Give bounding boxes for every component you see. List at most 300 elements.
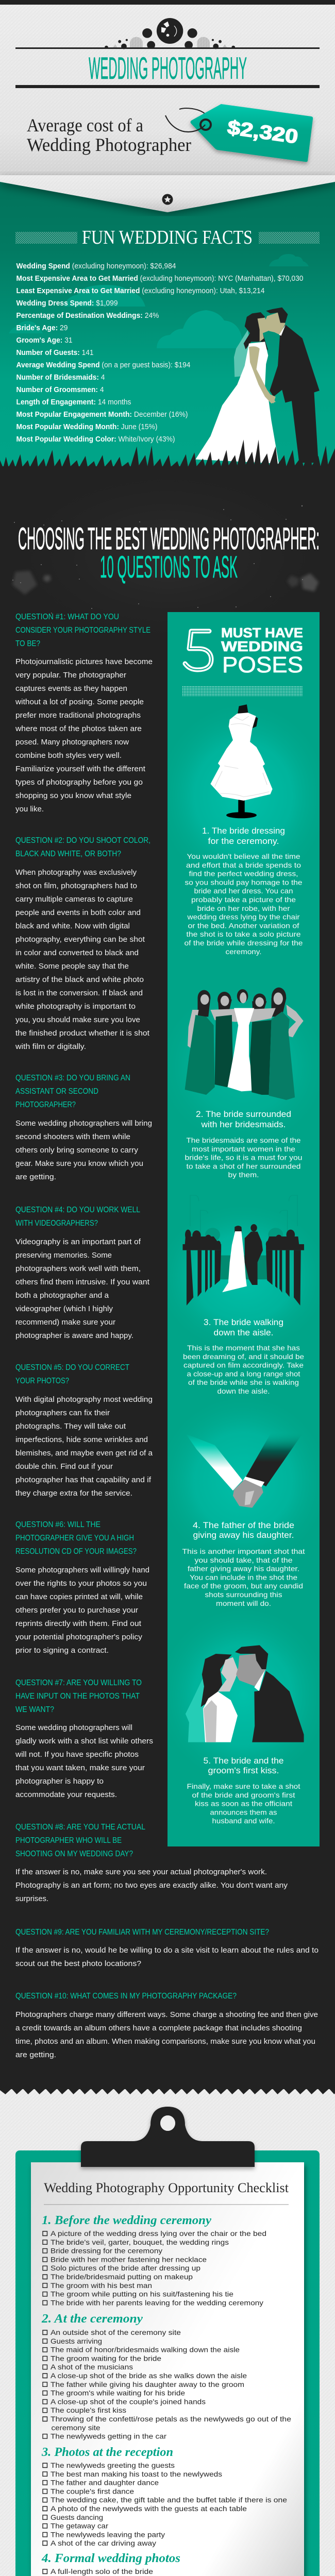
text: pose 5: Finally, make sure to take a shot xyxy=(187,1782,300,1790)
checklist section 4 xyxy=(41,2552,210,2576)
question 5: photographers can fix their xyxy=(15,1409,110,1417)
panel background xyxy=(167,612,320,1846)
text: pose 2 xyxy=(185,1136,302,1179)
caption 5: groom's first kiss. xyxy=(208,1766,279,1775)
question 5 xyxy=(15,1363,153,1498)
bride arm xyxy=(204,1700,217,1742)
question 4: others find them intrusive. If you want xyxy=(15,1278,150,1286)
checklist section 3 xyxy=(41,2446,287,2547)
question 8: If the answer is no, make sure you see your actual photographer's work. xyxy=(15,1868,267,1876)
poses heading xyxy=(221,625,303,677)
groom collar xyxy=(279,325,286,336)
question 5: photographs. They will take out xyxy=(15,1422,126,1431)
clouds xyxy=(9,254,309,348)
zigzag edge xyxy=(0,2087,335,2094)
question 7: accommodate your requests. xyxy=(15,1790,117,1799)
question 10: Photographers charge many different ways. Some charge a shooting fee and then give xyxy=(15,2010,318,2019)
question 1: TO BE? xyxy=(15,639,40,648)
top black bar xyxy=(0,0,335,5)
checklist section 2: A close-up shot of the bride as she walks down the aisle xyxy=(51,2371,247,2380)
illustration: holding hands xyxy=(186,1432,304,1508)
caption 1 xyxy=(202,826,285,846)
bride face and neck xyxy=(218,1657,238,1691)
hatched semicircles xyxy=(113,37,227,47)
text: pose 1: of the bride while dressing for the xyxy=(185,939,303,947)
text: pose 5: announces them as xyxy=(210,1808,277,1816)
caption 2 xyxy=(196,1109,291,1129)
text: pose 3: This is the moment that she has xyxy=(187,1344,300,1352)
gown 1 xyxy=(185,1015,215,1095)
gown 4 xyxy=(250,1020,272,1095)
hands xyxy=(233,1480,263,1508)
text: pose 1: the shot is to take a solo picture xyxy=(187,930,301,938)
illustration: bride walking down the aisle xyxy=(182,1195,304,1306)
tag hole xyxy=(200,120,211,130)
gown 5 xyxy=(269,1011,295,1100)
text: pose 1: You wouldn't believe all the time xyxy=(187,852,300,860)
question 6: prior to signing a contract. xyxy=(15,1646,109,1655)
caption 1: for the ceremony. xyxy=(208,836,279,846)
illustration: dress on stand xyxy=(210,704,273,818)
groom sleeve xyxy=(246,1432,304,1486)
groom hair xyxy=(266,308,288,323)
question 2: carry multiple cameras to capture xyxy=(15,895,133,904)
question 1: Familiarize yourself with the different xyxy=(15,765,146,773)
checklist section 2: The maid of honor/bridesmaids walking down the aisle xyxy=(51,2346,240,2354)
checklist section 2: ceremony site xyxy=(52,2424,100,2432)
price tag xyxy=(165,104,313,162)
caption 3 xyxy=(204,1317,283,1337)
question 2 xyxy=(15,836,150,1051)
facts list: Number of Guests: 141 xyxy=(16,348,94,357)
text: pose 4: This is another important shot that xyxy=(182,1547,305,1555)
question 4: Videography is an important part of xyxy=(15,1238,141,1246)
lens xyxy=(157,18,183,44)
question 3: gear. Make sure you know which you xyxy=(15,1159,143,1168)
question 6: others prefer you to purchase your xyxy=(15,1606,138,1615)
checklist section 2: Throwing of the confetti/rose petals as the newlyweds go out of the xyxy=(51,2415,291,2423)
veil xyxy=(186,1678,210,1742)
checklist title: Wedding Photography Opportunity Checklist xyxy=(44,2180,289,2195)
caption 2: with her bridesmaids. xyxy=(200,1120,286,1129)
question 1: without a lot of posing. Some people xyxy=(15,698,144,706)
checklist section 3: The wedding cake, the gift table and the buffet table if there is one xyxy=(51,2496,287,2504)
text: pose 4: shots surrounding this xyxy=(205,1590,282,1599)
right guests xyxy=(266,1230,304,1306)
illustration: first kiss xyxy=(186,1645,304,1742)
caption 4 xyxy=(193,1520,294,1540)
question 5: double chin. Find out if your xyxy=(15,1462,113,1471)
clip hole xyxy=(160,2115,175,2131)
checklist section 2: The newlyweds getting in the car xyxy=(51,2432,166,2441)
question 10: a credit towards an album others have a complete package that includes shooting xyxy=(15,2024,302,2032)
text: pose 5 xyxy=(187,1782,300,1825)
panel: 5 must have wedding poses xyxy=(167,612,320,1846)
text: pose 4: you should take, that of the xyxy=(195,1556,293,1564)
price: $2,320 xyxy=(226,117,299,148)
question 2: When photography was exclusively xyxy=(15,868,137,877)
question 7: that you want taken, make sure your xyxy=(15,1764,145,1772)
question 3: ASSISTANT OR SECOND xyxy=(15,1087,98,1096)
question 6: reprints directly with them. Find out xyxy=(15,1619,142,1628)
text: pose 3: of the bride while she is walking xyxy=(188,1378,299,1386)
text: pose 5: of the bride and groom's first xyxy=(192,1791,295,1799)
average cost label: Wedding Photographer xyxy=(27,134,191,155)
clip xyxy=(81,2107,255,2167)
question 10: are getting. xyxy=(15,2050,56,2059)
text: pose 3 xyxy=(183,1344,304,1395)
facts list: Wedding Dress Spend: $1,099 xyxy=(16,299,118,308)
hatch right xyxy=(259,232,320,244)
checklist section 2: The groom waiting for the bride xyxy=(51,2354,161,2362)
question 6 xyxy=(15,1520,149,1655)
question 4: photographer is aware and happy. xyxy=(15,1331,133,1340)
text: pose 2: most important women in the xyxy=(192,1145,295,1153)
question 4: recommend) make sure your xyxy=(15,1318,115,1327)
lens highlights xyxy=(161,22,169,32)
question 8: PHOTOGRAPHER WHO WILL BE xyxy=(15,1836,122,1845)
text: pose 5: husband and wife. xyxy=(212,1817,275,1825)
text: pose 4: You can include in the shot the xyxy=(190,1573,297,1581)
question 2: QUESTION #2: DO YOU SHOOT COLOR, xyxy=(15,836,150,845)
average cost label xyxy=(27,115,191,155)
question 9 xyxy=(15,1928,319,1968)
question 3: Some wedding photographers will bring xyxy=(15,1119,152,1128)
groom jacket xyxy=(252,1671,304,1742)
cuff xyxy=(243,1477,264,1487)
paper texture overlay xyxy=(0,5,335,212)
bridesmaid hair xyxy=(198,988,287,1020)
wedding couple xyxy=(195,308,320,464)
question 7: will not. If you have specific photos xyxy=(15,1750,139,1759)
groom face xyxy=(236,1654,266,1686)
facts list xyxy=(16,262,303,444)
question 4: WITH VIDEOGRAPHERS? xyxy=(15,1219,98,1228)
text: pose 1 xyxy=(185,852,303,956)
question 1: where most of the photos taken are xyxy=(15,724,142,733)
facts list: Number of Groomsmen: 4 xyxy=(16,385,104,394)
facts list: Wedding Spend (excluding honeymoon): $26,984 xyxy=(16,262,176,270)
left guests xyxy=(182,1230,221,1306)
question 8: QUESTION #8: ARE YOU THE ACTUAL xyxy=(15,1823,145,1832)
text: pose 5: kiss as soon as the officiant xyxy=(195,1800,292,1808)
facts list: Groom's Age: 31 xyxy=(16,336,72,345)
floral xyxy=(205,1228,220,1242)
groom body xyxy=(270,325,320,463)
question 5: they charge extra for the service. xyxy=(15,1489,132,1498)
question 4: preserving memories. Some xyxy=(15,1251,112,1260)
text: pose 1: ceremony. xyxy=(226,947,262,956)
clipboard paper xyxy=(31,2162,304,2576)
text: pose 2: The bridesmaids are some of the xyxy=(187,1136,301,1144)
checklist section 3: 3. Photos at the reception xyxy=(41,2446,173,2459)
hatch left xyxy=(15,232,77,244)
question 6: can have copies printed at will, while xyxy=(15,1592,143,1601)
question 2: the finished product whether it is shot xyxy=(15,1029,150,1038)
question 7: photographer is happy to xyxy=(15,1777,104,1786)
grass silhouette xyxy=(0,439,335,489)
question 1: combine both styles very well. xyxy=(15,751,122,760)
star badge xyxy=(162,194,173,205)
groom hand xyxy=(270,394,276,403)
checklist section 3: The newlyweds greeting the guests xyxy=(51,2461,175,2469)
question 6: your potential photographer's policy xyxy=(15,1633,143,1641)
checklist section 3: Guests dancing xyxy=(51,2513,103,2521)
text: pose 3: down the aisle. xyxy=(217,1387,270,1395)
gown 2 xyxy=(215,1015,233,1087)
side dots xyxy=(105,28,235,49)
question 2: people and events in both color and xyxy=(15,908,141,917)
groom hair xyxy=(235,1645,268,1669)
question 3: QUESTION #3: DO YOU BRING AN xyxy=(15,1074,130,1082)
question 5: imperfections, hide some wrinkles and xyxy=(15,1435,148,1444)
question 1: QUESTION #1: WHAT DO YOU xyxy=(15,613,119,621)
bride arm xyxy=(249,346,276,403)
checklist section 2: A close-up shot of the couple's joined hands xyxy=(51,2397,206,2405)
poses heading: POSES xyxy=(222,652,303,677)
tag string front xyxy=(165,115,205,132)
text: pose 1: and effort that a bride spends to xyxy=(186,861,301,869)
groom collar xyxy=(254,1670,265,1691)
question 6: RESOLUTION CD OF YOUR IMAGES? xyxy=(15,1547,137,1556)
checklist section 2: An outside shot of the ceremony site xyxy=(51,2328,181,2336)
veil xyxy=(234,330,251,377)
question 8: Photography is an art form; no two eyes are exactly alike. You don't want any xyxy=(15,1881,288,1890)
header ornament: camera lens xyxy=(105,18,235,49)
bride dress xyxy=(203,1691,238,1742)
checklist section 2: Guests arriving xyxy=(51,2337,102,2345)
checklist section 2 xyxy=(41,2312,291,2441)
bride gown xyxy=(228,1008,254,1091)
bokeh background xyxy=(0,459,335,654)
text: pose 1: or the bed. Another variation of xyxy=(188,921,299,929)
bride hair back xyxy=(244,312,268,350)
caption 3: 3. The bride walking xyxy=(204,1317,283,1327)
question 2: in color and converted to black and xyxy=(15,948,139,957)
question 8: SHOOTING ON MY WEDDING DAY? xyxy=(15,1850,133,1858)
text: pose 1: bride and her dress. You can xyxy=(194,887,293,895)
text: pose 3: been dreaming of, and it should be xyxy=(183,1352,304,1361)
groom xyxy=(245,1224,263,1285)
question 2: white. Some people say that the xyxy=(15,962,129,971)
question 5: blemishes, and maybe even get rid of a xyxy=(15,1449,153,1458)
question 8 xyxy=(15,1823,288,1903)
question 5: YOUR PHOTOS? xyxy=(15,1377,69,1385)
tag string back xyxy=(179,108,205,114)
section heading: choosing the best wedding photographer xyxy=(18,521,320,584)
checklist section 1: The bride with her parents leaving for the wedding ceremony xyxy=(51,2298,263,2307)
rule above title xyxy=(15,47,320,49)
caption 3: down the aisle. xyxy=(213,1328,273,1337)
question 1: Photojournalistic pictures have become xyxy=(15,657,153,666)
question 4: QUESTION #4: DO YOU WORK WELL xyxy=(15,1206,140,1214)
question 9: scout out the best photo locations? xyxy=(15,1959,141,1968)
question 6: over the rights to your photos so you xyxy=(15,1579,147,1588)
checklist section 1: Bride with her mother fastening her necklace xyxy=(51,2255,207,2263)
average cost label: Average cost of a xyxy=(27,115,143,135)
caption 1: 1. The bride dressing xyxy=(202,826,285,836)
wedding dress xyxy=(195,342,279,464)
question 2: with film or digitally. xyxy=(15,1042,86,1051)
caption 5: 5. The bride and the xyxy=(203,1756,283,1766)
rule below title xyxy=(15,85,320,88)
checklist section 1: 1. Before the wedding ceremony xyxy=(42,2214,211,2227)
question 10: QUESTION #10: WHAT COMES IN MY PHOTOGRAPHY PACKAGE? xyxy=(15,1992,237,2001)
question 5: photographer has that capability and if xyxy=(15,1476,152,1484)
aisle floor xyxy=(220,1256,267,1279)
question 4 xyxy=(15,1206,150,1340)
question 9: QUESTION #9: ARE YOU FAMILIAR WITH MY CEREMONY/RECEPTION SITE? xyxy=(15,1928,269,1937)
question 1: shopping so you know what style xyxy=(15,791,131,800)
question 7 xyxy=(15,1679,153,1799)
bride xyxy=(234,1226,242,1233)
section heading: fun wedding facts xyxy=(15,227,320,248)
gray envelope flap xyxy=(0,175,335,212)
question 1: prefer more traditional photographs xyxy=(15,711,141,720)
question 4: both a photographer and a xyxy=(15,1291,109,1300)
text: pose 3: captured on film accordingly. Take xyxy=(183,1361,304,1369)
lower paper background xyxy=(0,2089,335,2576)
text: pose 1: bride on her robe, with her xyxy=(197,904,290,912)
checklist section 2: The couple's first kiss xyxy=(51,2406,126,2414)
question 5: With digital photography most wedding xyxy=(15,1395,153,1404)
text: pose 2: by them. xyxy=(228,1171,259,1179)
checklist section 4: A full-length solo of the bride xyxy=(51,2567,153,2575)
checklist section 3: The newlyweds leaving the party xyxy=(51,2530,165,2538)
facts list: Most Expensive Area to Get Married (excluding honeymoon): NYC (Manhattan), $70,030 xyxy=(16,274,303,283)
bride face xyxy=(258,318,269,342)
question 2: black and white. Now with digital xyxy=(15,922,130,930)
text: pose 4: father giving away his daughter. xyxy=(188,1565,299,1573)
halos xyxy=(153,698,333,1788)
facts list: Percentage of Destination Weddings: 24% xyxy=(16,311,159,320)
caption 4: 4. The father of the bride xyxy=(193,1520,294,1530)
question 1 xyxy=(15,613,153,814)
question 6: Some photographers will willingly hand xyxy=(15,1566,149,1574)
question 2: shot on film, photographers had to xyxy=(15,882,137,890)
checklist section 2: The groom's while waiting for his bride xyxy=(51,2389,185,2397)
checklist section 2: 2. At the ceremony xyxy=(41,2312,143,2326)
text: pose 2: to take a shot of her surrounded xyxy=(187,1162,301,1170)
question 1: captures events as they happen xyxy=(15,684,127,693)
question 5: QUESTION #5: DO YOU CORRECT xyxy=(15,1363,129,1372)
text: pose 2: bride's life, so it is a must for you xyxy=(185,1154,302,1162)
facts list: Least Expensive Area to Get Married (excluding honeymoon): Utah, $13,214 xyxy=(16,286,265,295)
question 1: very popular. The photographer xyxy=(15,671,126,680)
green facts section background xyxy=(0,175,335,471)
text: pose 1: probably take a picture of the xyxy=(191,895,296,904)
question 2: BLACK AND WHITE, OR BOTH? xyxy=(15,850,121,858)
question 3: are getting. xyxy=(15,1173,56,1181)
question 1: CONSIDER YOUR PHOTOGRAPHY STYLE xyxy=(15,626,150,635)
question 9: If the answer is no, would he be willing to do a site visit to learn about the rules and to xyxy=(15,1946,319,1955)
facts list: Length of Engagement: 14 months xyxy=(16,398,131,406)
checklist section 1: A picture of the wedding dress lying over the chair or the bed xyxy=(51,2229,266,2238)
arches xyxy=(190,1195,297,1243)
caption 2: 2. The bride surrounded xyxy=(196,1109,291,1119)
checklist section 3: The father and daughter dance xyxy=(51,2479,159,2487)
bride sleeve xyxy=(186,1434,243,1490)
question 7: WE WANT? xyxy=(15,1705,54,1714)
question 4: photographers work well with them, xyxy=(15,1264,141,1273)
texture: paper top xyxy=(0,5,335,216)
big number 5 xyxy=(185,631,211,670)
text: pose 4: face of the groom, but any candid xyxy=(184,1582,303,1590)
text: pose 4 xyxy=(182,1547,305,1607)
question 2: photography, everything can be shot xyxy=(15,935,145,944)
checklist section 3: The getaway car xyxy=(51,2522,108,2530)
checklist section 1: The bride's veil, garter, bouquet, the wedding rings xyxy=(51,2238,229,2246)
lower paper texture xyxy=(0,2089,335,2576)
caption 4: giving away his daughter. xyxy=(193,1530,294,1540)
text: pose 4: moment will do. xyxy=(216,1599,271,1607)
question 8: surprises. xyxy=(15,1894,48,1903)
question 1: types of photography before you go xyxy=(15,778,143,787)
checklist section 3: A shot of the car driving away xyxy=(51,2539,156,2547)
checklist section 1: Solo pictures of the bride after dressing up xyxy=(51,2264,200,2272)
caption 5 xyxy=(203,1756,283,1775)
heading text: FUN WEDDING FACTS xyxy=(82,227,253,248)
poses heading: MUST HAVE xyxy=(221,625,303,640)
text: pose 1: so you should pay homage to the xyxy=(185,878,303,886)
checklist section 1: Bride dressing for the ceremony xyxy=(51,2247,162,2255)
checklist section 1: The bride/bridesmaid putting on makeup xyxy=(51,2273,193,2281)
question 7: QUESTION #7: ARE YOU WILLING TO xyxy=(15,1679,142,1687)
question 1: you like. xyxy=(15,805,44,814)
question 7: HAVE INPUT ON THE PHOTOS THAT xyxy=(15,1692,140,1701)
illustration: bride and bridesmaids xyxy=(185,988,304,1100)
groom face xyxy=(265,313,285,335)
question 2: artistry of the black and white photo xyxy=(15,975,144,984)
dark questions section background xyxy=(0,466,335,2089)
clipboard xyxy=(15,2107,320,2576)
checklist section 3: The best man making his toast to the newlyweds xyxy=(51,2470,222,2478)
checklist section 1: The groom while putting on his suit/fastening his tie xyxy=(51,2290,233,2298)
text: pose 3: a close-up and a long range shot xyxy=(187,1369,300,1378)
title rule xyxy=(44,2204,289,2205)
dotted band xyxy=(182,686,303,696)
question 3: others only bring someone to carry xyxy=(15,1146,139,1155)
text: pose 1: wedding dress lying by the chair xyxy=(187,913,300,921)
question 7: Some wedding photographers will xyxy=(15,1723,132,1732)
poses heading: WEDDING xyxy=(221,638,303,654)
checklist section 1: The groom with his best man xyxy=(51,2281,152,2290)
facts list: Number of Bridesmaids: 4 xyxy=(16,373,105,382)
question 6: QUESTION #6: WILL THE xyxy=(15,1520,100,1529)
facts list: Bride's Age: 29 xyxy=(16,324,68,332)
question 2: white photography is important to xyxy=(15,1002,136,1011)
checklist section 2: The father while giving his daughter away to the groom xyxy=(51,2380,244,2388)
faces and arms xyxy=(188,992,304,1048)
question 2: is lost in the conversion. If black and xyxy=(15,989,143,997)
checklist section 1 xyxy=(42,2214,266,2307)
question 1: posed. Many photographers now xyxy=(15,738,129,747)
question 6: PHOTOGRAPHER GIVE YOU A HIGH xyxy=(15,1534,134,1543)
facts list: Most Popular Wedding Color: White/Ivory (43%) xyxy=(16,435,175,444)
facts list: Most Popular Wedding Month: June (15%) xyxy=(16,422,158,431)
question 4: videographer (which I highly xyxy=(15,1304,113,1313)
question 3 xyxy=(15,1074,152,1181)
checklist section 3: The couple's first dance xyxy=(51,2487,134,2495)
question 10: time, photos and an album. When making comparisons, make sure you know what you xyxy=(15,2037,315,2046)
facts list: Average Wedding Spend (on a per guest basis): $194 xyxy=(16,361,191,369)
checklist section 4: 4. Formal wedding photos xyxy=(41,2552,180,2565)
question 3: second shooters with them while xyxy=(15,1132,130,1141)
question 10 xyxy=(15,1992,318,2059)
question 7: gladly work with a shot list while others xyxy=(15,1737,153,1745)
checklist section 3: A photo of the newlyweds with the guests at each table xyxy=(51,2504,247,2513)
question 2: you, you should make sure you love xyxy=(15,1015,140,1024)
